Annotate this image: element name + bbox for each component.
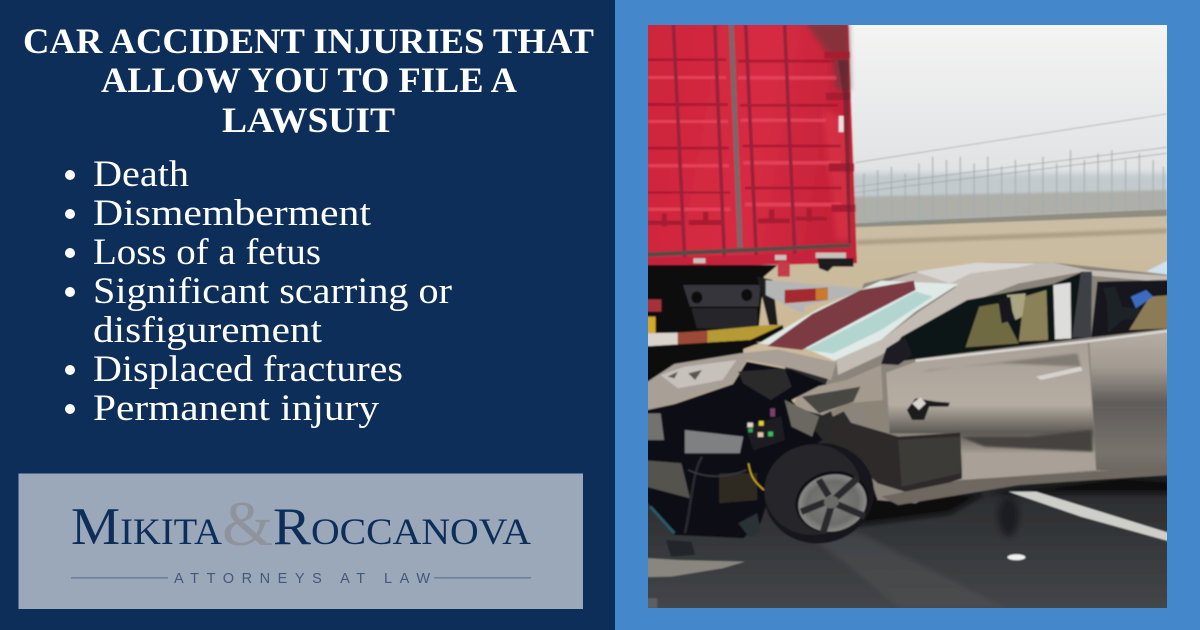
injury list: Displaced fractures	[93, 349, 403, 390]
field base	[648, 222, 1167, 443]
sky	[847, 25, 1167, 192]
logo: Mikita & Roccanova Attorneys at Law: ATTORNEYS AT LAW	[174, 571, 430, 587]
logo: Mikita & Roccanova Attorneys at Law	[18, 474, 583, 609]
wheel arch bumper	[840, 422, 962, 492]
door latches	[648, 52, 856, 227]
rear door	[1089, 332, 1170, 473]
yellow and white rear bar	[640, 333, 678, 347]
windscreen	[759, 281, 959, 361]
right blue panel	[615, 0, 1200, 630]
engine bay	[640, 362, 824, 538]
logo: Mikita & Roccanova Attorneys at Law: ROCCANOVA	[273, 498, 531, 556]
left navy panel	[0, 0, 615, 630]
dry field	[743, 215, 1167, 343]
front door	[886, 343, 1096, 481]
bare tree line and power lines	[743, 114, 1170, 343]
photo: wrecked car beside red truck	[640, 15, 1180, 615]
fuse box	[745, 417, 785, 450]
injury list: Significant scarring or	[93, 271, 452, 312]
tyre	[764, 442, 874, 544]
road	[648, 472, 1167, 608]
injury list: Permanent injury	[93, 388, 380, 429]
shadow under car	[858, 476, 1167, 528]
seats	[965, 303, 1019, 347]
rear window and seat	[1091, 280, 1170, 337]
door rods	[673, 25, 795, 260]
title	[23, 21, 594, 140]
title: ALLOW YOU TO FILE A	[101, 60, 517, 100]
crumpled hood	[640, 349, 836, 412]
title: CAR ACCIDENT INJURIES THAT	[23, 21, 594, 61]
injury list: Dismemberment	[93, 193, 372, 234]
bottom frame	[640, 243, 851, 257]
injury list: Death	[93, 154, 190, 195]
logo: Mikita & Roccanova Attorneys at Law: MIKITA	[71, 498, 222, 556]
title: LAWSUIT	[222, 100, 395, 140]
crumpled wing	[830, 406, 844, 418]
truck undercarriage, tail lamp and bumper	[640, 265, 860, 390]
road reflection	[1007, 554, 1025, 560]
injury list	[65, 154, 452, 429]
side window opening	[898, 272, 1088, 362]
dark fill behind crumple zone	[784, 366, 852, 446]
truck container	[640, 20, 857, 281]
injury list: disfigurement	[93, 310, 323, 351]
car body silhouette	[826, 263, 1170, 503]
container ribs	[648, 58, 841, 194]
roof	[836, 263, 1170, 375]
road streaks	[820, 533, 980, 603]
logo: Mikita & Roccanova Attorneys at Law: &	[222, 488, 273, 559]
injury list: Loss of a fetus	[93, 232, 321, 273]
car	[640, 262, 1170, 608]
door centre seam	[729, 25, 743, 250]
wires	[650, 457, 764, 533]
mirror	[881, 337, 912, 365]
torn plastic debris	[738, 513, 761, 538]
lane marking	[1009, 492, 1170, 542]
door handle	[1036, 367, 1083, 380]
rim spokes	[794, 470, 870, 537]
chrome sill	[916, 329, 1170, 362]
door frame and pillars	[1053, 283, 1071, 339]
